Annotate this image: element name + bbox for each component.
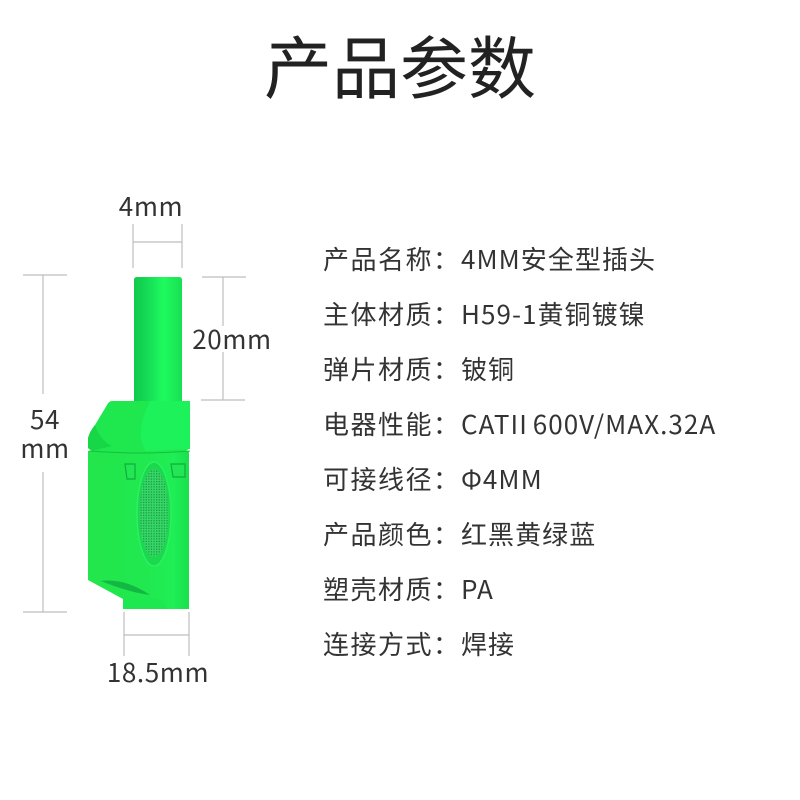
text: 4MM安全型插头	[461, 240, 656, 277]
text: 红黑黄绿蓝	[461, 515, 596, 552]
plug body	[88, 451, 189, 609]
spec: electrical performance: 电器性能：	[323, 405, 461, 442]
20mm bracket	[201, 277, 246, 400]
spec: connection method: 连接方式：	[323, 625, 461, 662]
body tabs	[125, 464, 135, 479]
text: 焊接	[461, 625, 515, 662]
spec: wire diameter	[323, 460, 543, 497]
spec: product name	[323, 240, 656, 277]
label: 18.5mm: 18.5mm	[107, 653, 209, 690]
collar seam	[89, 451, 190, 453]
spec: product name: 产品名称：	[323, 240, 461, 277]
spec: spring material: 弹片材质：	[323, 350, 461, 387]
label: 54 mm: 54	[30, 400, 60, 437]
text: PA	[461, 570, 494, 607]
plug collar	[88, 401, 190, 452]
bottom notch	[101, 581, 150, 595]
icon: green plug	[88, 277, 190, 609]
label: 4mm: 4mm	[119, 187, 183, 224]
spec: wire diameter: 可接线径：	[323, 460, 461, 497]
spec: electrical performance	[323, 405, 716, 442]
spec: body material: 主体材质：	[323, 295, 461, 332]
label: 54 mm: mm	[20, 429, 70, 466]
text: 铍铜	[461, 350, 515, 387]
text: H59-1黄铜镀镍	[461, 295, 646, 332]
spec: colours	[323, 515, 596, 552]
text: CATII 600V/MAX.32A	[461, 405, 716, 442]
spec: body material	[323, 295, 646, 332]
18.5mm bracket	[124, 612, 189, 656]
dimension lines	[23, 224, 246, 656]
title: 产品参数	[264, 14, 536, 113]
plug pin	[134, 277, 182, 402]
spec: shell material: 塑壳材质：	[323, 570, 461, 607]
label: 54 mm	[20, 400, 70, 466]
oval grip	[137, 462, 171, 566]
4mm bracket	[133, 224, 182, 268]
text: Φ4MM	[461, 460, 543, 497]
54mm bracket	[23, 275, 67, 612]
label: 20mm: 20mm	[192, 320, 272, 357]
spec: colours: 产品颜色：	[323, 515, 461, 552]
